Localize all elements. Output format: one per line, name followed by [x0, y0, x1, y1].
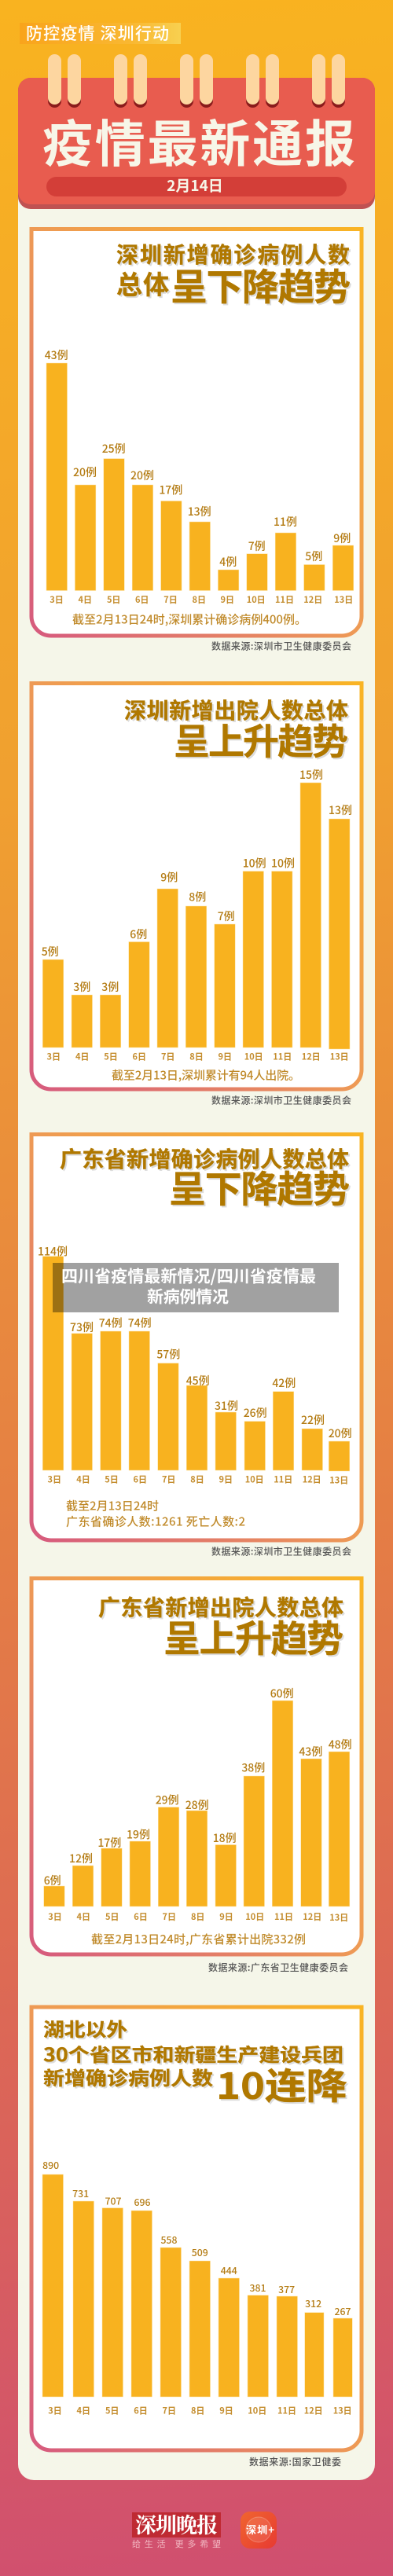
bar chart: 48例 [329, 1737, 352, 1752]
panel: Shenzhen new discharged [31, 684, 362, 1089]
bar chart: 558 [160, 2233, 178, 2247]
bar chart [42, 767, 352, 1062]
bar chart: 74例 [99, 1316, 123, 1331]
bar chart: 6例 [44, 1873, 61, 1888]
heading [124, 694, 348, 765]
heading: 呈上升趋势 [163, 1609, 343, 1663]
heading: 10连降 [216, 2058, 347, 2110]
bar chart: 13日 [330, 1050, 349, 1062]
bar chart: 6日 [134, 1473, 147, 1485]
bar chart: 43例 [299, 1744, 322, 1760]
icon: Shenzhen+ app [241, 2512, 277, 2548]
logo: Shenzhen Evening News: 深圳晚报 [135, 2508, 218, 2539]
calendar header [18, 78, 375, 209]
bar chart: 8日 [191, 2405, 204, 2417]
bar chart: 8例 [189, 890, 206, 905]
heading: 呈下降趋势 [171, 257, 351, 311]
heading [98, 1591, 343, 1663]
bar chart: 12日 [302, 1050, 321, 1062]
bar chart: 20例 [329, 1426, 352, 1441]
bar chart: 12例 [69, 1851, 93, 1866]
bar chart: 18例 [213, 1830, 237, 1846]
bar chart: 8日 [189, 1050, 204, 1062]
bar chart: 25例 [102, 441, 126, 457]
logo: Shenzhen Evening News [132, 2508, 221, 2550]
heading: 广东省新增出院人数总体 [98, 1591, 343, 1622]
source note: 数据来源:深圳市卫生健康委员会 [211, 640, 351, 652]
bar chart: 731 [72, 2187, 89, 2200]
bar chart: 4日 [79, 593, 92, 606]
panel: Guangdong new confirmed cases [31, 1135, 362, 1540]
bar chart: 707 [105, 2194, 122, 2208]
bar chart: 3例 [73, 979, 90, 995]
bar chart: 28例 [185, 1797, 209, 1813]
heading: 总体 [116, 264, 169, 302]
heading: 深圳新增出院人数总体 [124, 694, 348, 725]
heading [60, 1143, 350, 1213]
bar chart: 19例 [127, 1827, 150, 1843]
bar chart: 17例 [97, 1835, 121, 1851]
heading: 30个省区市和新疆生产建设兵团 [43, 2040, 343, 2067]
summary note [66, 1498, 245, 1529]
bar chart: 5例 [42, 944, 59, 960]
bar chart: 26例 [244, 1405, 267, 1421]
bar chart: 8日 [193, 593, 206, 606]
bar chart: 9例 [160, 869, 178, 885]
bar chart: 11例 [274, 514, 297, 530]
panel: Guangdong new discharged [31, 1578, 362, 1954]
icon: Shenzhen+ app: 深圳+ [246, 2522, 274, 2537]
bar chart: 5日 [104, 1050, 118, 1062]
bar chart: 267 [335, 2305, 351, 2318]
source note: 数据来源:深圳市卫生健康委员会 [211, 1094, 351, 1106]
bar chart: 17例 [159, 483, 182, 498]
bar chart: 7日 [162, 1473, 175, 1485]
heading: 广东省新增确诊病例人数总体 [60, 1143, 349, 1174]
bar chart: 10日 [247, 593, 266, 606]
bar chart: 9例 [333, 530, 351, 546]
bar chart: 9日 [219, 1473, 233, 1485]
bar chart: 7日 [163, 2405, 176, 2417]
bar chart: 13日 [333, 2405, 352, 2417]
source note: 数据来源:深圳市卫生健康委员会 [211, 1545, 351, 1558]
heading: 呈下降趋势 [169, 1159, 350, 1213]
bar chart: 3日 [47, 1050, 61, 1062]
heading [116, 238, 351, 311]
summary note: 截至2月13日24时,深圳累计确诊病例400例。 [72, 611, 307, 627]
bar chart: 5例 [305, 549, 322, 564]
bar chart: 13日 [334, 593, 353, 606]
panel: Shenzhen new confirmed cases [31, 229, 362, 636]
heading [43, 2014, 347, 2110]
bar chart: 22例 [301, 1412, 325, 1428]
bar chart: 312 [305, 2297, 321, 2310]
summary note: 截至2月13日,深圳累计有94人出院。 [112, 1067, 300, 1083]
bar chart: 9日 [219, 2405, 233, 2417]
bar chart: 6日 [133, 1050, 146, 1062]
bar chart: 11日 [274, 1910, 293, 1923]
bar chart: 5日 [105, 1910, 119, 1923]
bar chart: 11日 [274, 1473, 292, 1485]
bar chart: 20例 [73, 464, 97, 480]
bar chart: 3日 [50, 593, 64, 606]
bar chart: 10日 [245, 1910, 264, 1923]
bar chart: 7例 [248, 538, 266, 554]
bar chart: 4日 [75, 1050, 89, 1062]
bar chart: 4日 [76, 1473, 90, 1485]
bar chart: 3例 [101, 979, 119, 995]
bar chart: 20例 [130, 468, 154, 483]
bar chart: 9日 [219, 1910, 233, 1923]
overlay caption banner: 四川省疫情最新情况/四川省疫情最 [61, 1264, 316, 1287]
bar chart: 381 [250, 2281, 266, 2295]
bar chart: 7日 [163, 1910, 176, 1923]
bar chart: 12日 [303, 1473, 321, 1485]
bar chart: 13例 [188, 504, 211, 519]
bar chart: 6例 [130, 927, 147, 942]
bar chart: 7日 [161, 1050, 174, 1062]
bar chart [45, 347, 354, 606]
bar chart: 444 [221, 2264, 237, 2277]
bar chart: 5日 [107, 593, 120, 606]
bar chart: 73例 [70, 1319, 94, 1335]
heading: 新增确诊病例人数 [43, 2063, 213, 2090]
bar chart: 57例 [156, 1347, 180, 1363]
heading: 深圳新增确诊病例人数 [116, 238, 350, 270]
summary note: 截至2月13日24时,广东省累计出院332例 [91, 1931, 306, 1947]
tag: campaign label: 防控疫情 深圳行动 [26, 21, 169, 45]
bar chart: 13例 [329, 802, 352, 818]
bar chart: 6日 [135, 593, 149, 606]
bar chart: 7日 [163, 593, 178, 606]
bar chart: 10例 [243, 855, 266, 871]
source note: 数据来源:国家卫健委 [249, 2455, 341, 2468]
bar chart: 29例 [156, 1793, 179, 1808]
bar chart: 8日 [190, 1473, 204, 1485]
bar chart: 3日 [48, 1473, 61, 1485]
bar chart: 509 [192, 2246, 208, 2259]
overlay caption banner: 新病例情况 [147, 1284, 229, 1308]
bar chart [38, 1243, 352, 1487]
bar chart: 696 [134, 2196, 151, 2209]
date pill [46, 174, 347, 196]
bar chart [44, 1686, 352, 1924]
bar chart: 60例 [270, 1686, 294, 1701]
bar chart: 3日 [48, 1910, 62, 1923]
calendar binding rings [48, 54, 345, 108]
bar chart: 38例 [241, 1760, 265, 1776]
bar chart: 43例 [45, 347, 68, 363]
bar chart: 74例 [128, 1316, 152, 1331]
bar chart: 31例 [215, 1398, 238, 1414]
bar chart [42, 2159, 352, 2417]
summary note: 广东省确诊人数:1261 死亡人数:2 [66, 1514, 245, 1529]
bar chart: 9日 [221, 593, 234, 606]
bar chart: 6日 [134, 1910, 148, 1923]
bar chart: 45例 [186, 1373, 210, 1389]
bar chart: 11日 [273, 1050, 292, 1062]
heading: 湖北以外 [43, 2014, 127, 2042]
bar chart: 10例 [271, 855, 295, 871]
date pill: 2月14日 [167, 174, 223, 196]
bar chart: 8日 [191, 1910, 204, 1923]
bar chart: 890 [42, 2159, 59, 2172]
logo: Shenzhen Evening News: 给生活 更多希望 [132, 2537, 221, 2550]
summary note: 截至2月13日24时 [66, 1498, 159, 1514]
bar chart: 13日 [329, 1474, 348, 1487]
source note: 数据来源:广东省卫生健康委员会 [208, 1961, 348, 1974]
bar chart: 6日 [134, 2405, 148, 2417]
bar chart: 114例 [38, 1243, 68, 1259]
bar chart: 10日 [244, 1050, 263, 1062]
bar chart: 5日 [105, 1473, 119, 1485]
bar chart: 12日 [303, 593, 322, 606]
bar chart: 5日 [105, 2405, 119, 2417]
bar chart: 11日 [277, 2405, 296, 2417]
bar chart: 3日 [48, 2405, 62, 2417]
title: 疫情最新通报 [42, 105, 355, 177]
bar chart: 4日 [77, 1910, 90, 1923]
bar chart: 13日 [329, 1911, 348, 1924]
bar chart: 10日 [248, 2405, 266, 2417]
overlay caption banner [53, 1263, 339, 1312]
bar chart: 11日 [275, 593, 294, 606]
bar chart: 377 [278, 2283, 295, 2296]
heading: 呈上升趋势 [174, 714, 348, 765]
bar chart: 12日 [303, 1910, 321, 1923]
bar chart: 4例 [219, 554, 237, 570]
bar chart: 10日 [245, 1473, 264, 1485]
bar chart: 4日 [77, 2405, 90, 2417]
bar chart: 15例 [299, 767, 323, 783]
bar chart: 42例 [272, 1375, 296, 1391]
bar chart: 7例 [218, 908, 235, 924]
bar chart: 12日 [304, 2405, 323, 2417]
panel: outside Hubei new confirmed [31, 2007, 362, 2450]
bar chart: 9日 [219, 1050, 232, 1062]
